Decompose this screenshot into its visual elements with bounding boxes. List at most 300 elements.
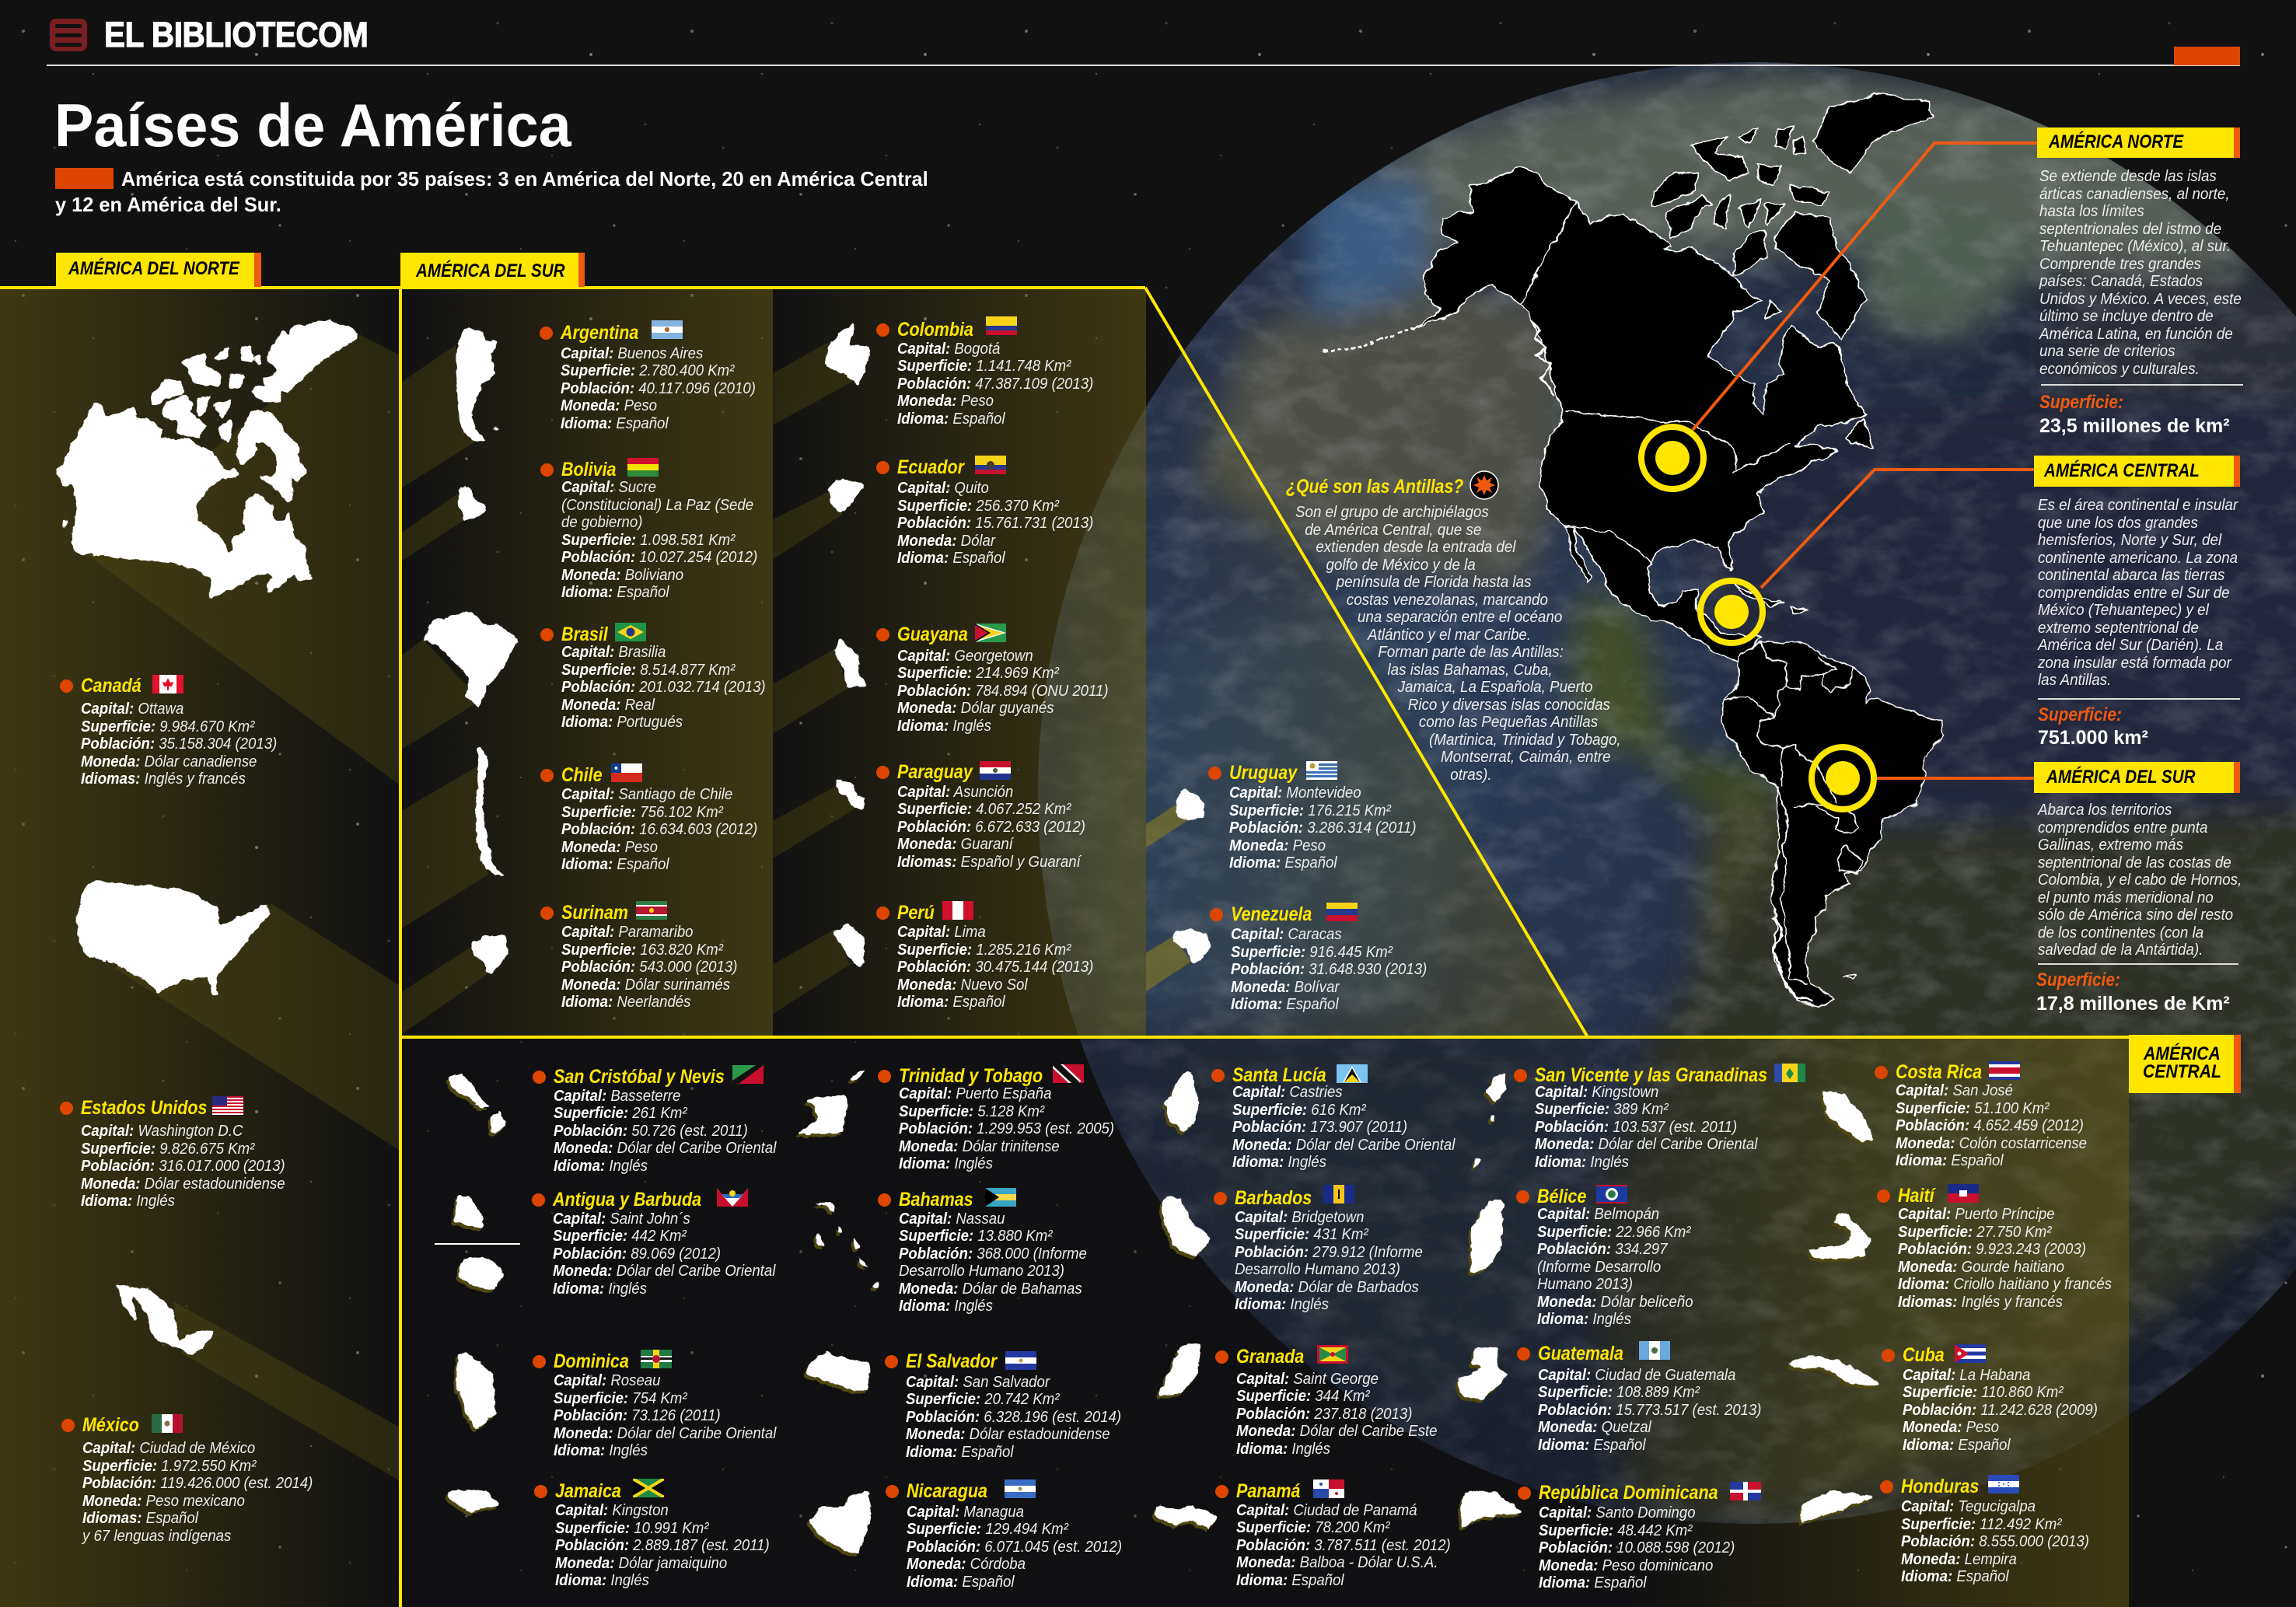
country: Haití	[1877, 1184, 2110, 1311]
country: Cuba: Cuba	[1903, 1344, 1945, 1366]
text: Antillas description: extienden desde la entrada del	[1316, 539, 1515, 556]
text: Antillas description: una separación entre el océano	[1358, 609, 1562, 626]
country: Costa Rica: Capital: San José	[1896, 1082, 2013, 1099]
stat: superficie sur: Superficie:	[2036, 969, 2120, 990]
country: Paraguay: Paraguay	[897, 761, 973, 783]
country: México: México	[82, 1414, 139, 1436]
country: San Cristóbal y Nevis: Capital: Basseterre	[554, 1087, 680, 1104]
country: Venezuela	[1210, 903, 1443, 1014]
text: América del Sur description: Abarca los territorios	[2038, 802, 2172, 819]
stat value: sur: 17,8 millones de Km²	[2036, 993, 2230, 1015]
country: Panamá	[1215, 1479, 1449, 1589]
country: Nicaragua: Superficie: 129.494 Km²	[907, 1521, 1068, 1538]
panel: América del Norte gradient and beams	[0, 289, 399, 1607]
country: Granada: Población: 237.818 (2013)	[1236, 1406, 1412, 1423]
country: Guayana: Capital: Georgetown	[897, 647, 1033, 664]
tab backgrounds	[56, 128, 2241, 1093]
text: América Norte description: último se incluye dentro de	[2039, 308, 2214, 325]
country: Brasil	[540, 623, 774, 732]
country: Surinam: Población: 543.000 (2013)	[561, 959, 737, 976]
stat: superficie norte: Superficie:	[2039, 392, 2123, 413]
country: Bélice: Superficie: 22.966 Km²	[1537, 1224, 1690, 1241]
country: Guatemala	[1517, 1342, 1750, 1455]
country: Santa Lucía: Población: 173.907 (2011)	[1232, 1119, 1407, 1136]
country: Dominica: Población: 73.126 (2011)	[554, 1407, 721, 1424]
country: Bahamas: Capital: Nassau	[899, 1210, 1005, 1227]
heading: América Central: CENTRAL	[2143, 1061, 2221, 1082]
country: San Cristóbal y Nevis: Moneda: Dólar del Caribe Oriental	[554, 1140, 776, 1157]
country: Ecuador: Capital: Quito	[897, 480, 989, 497]
country: Bélice: Bélice	[1537, 1186, 1586, 1207]
country: México: Capital: Ciudad de México	[82, 1440, 255, 1457]
panel: América del Sur column gradients and beams	[400, 289, 1589, 1036]
country: Antigua y Barbuda: Superficie: 442 Km²	[553, 1228, 687, 1245]
country: Canadá: Canadá	[81, 675, 142, 697]
map: Estados Unidos	[78, 881, 271, 995]
marker: América Norte	[1641, 427, 1704, 489]
country: Honduras: Idioma: Español	[1901, 1568, 2009, 1585]
country: San Vicente y las Granadinas: Superficie: 389 Km²	[1535, 1101, 1669, 1118]
country: Ecuador: Idioma: Español	[897, 550, 1005, 567]
heading: América Norte: AMÉRICA NORTE	[2049, 131, 2183, 152]
country: Trinidad y Tobago: Capital: Puerto España	[899, 1085, 1051, 1102]
country: Surinam: Moneda: Dólar surinamés	[561, 976, 730, 994]
text: Antillas description: Montserrat, Caimán, entre	[1441, 749, 1610, 766]
country: Honduras: Superficie: 112.492 Km²	[1901, 1516, 2061, 1533]
country: Dominica: Dominica	[554, 1350, 629, 1372]
country: Venezuela: Venezuela	[1231, 903, 1312, 925]
country: Barbados: Capital: Bridgetown	[1235, 1209, 1364, 1226]
text: América Central description: América del Sur (Darién). La	[2038, 637, 2223, 654]
country: Granada	[1215, 1345, 1449, 1459]
country: Costa Rica: Superficie: 51.100 Km²	[1896, 1099, 2049, 1116]
country: México: Moneda: Peso mexicano	[82, 1493, 245, 1510]
country: El Salvador: Idioma: Español	[905, 1444, 1013, 1461]
country: Jamaica: Idioma: Inglés	[555, 1572, 649, 1589]
country: Guatemala: Guatemala	[1538, 1343, 1623, 1364]
text: América Norte description: una serie de criterios	[2039, 343, 2175, 360]
country: Perú: Perú	[897, 902, 935, 924]
country: Honduras: Capital: Tegucigalpa	[1901, 1498, 2036, 1515]
country: Canadá: Población: 35.158.304 (2013)	[81, 735, 277, 753]
text: América del Sur description: salvedad de la Antártida).	[2038, 941, 2203, 959]
map: América continent silhouette	[1322, 93, 1944, 1008]
country: Antigua y Barbuda: Moneda: Dólar del Caribe Oriental	[553, 1263, 775, 1280]
country: Uruguay: Superficie: 176.215 Km²	[1229, 802, 1391, 819]
icon: Antillas star	[1470, 471, 1498, 499]
heading: América del Sur: AMÉRICA DEL SUR	[416, 260, 565, 281]
country: Santa Lucía: Santa Lucía	[1232, 1064, 1326, 1086]
country: Bolivia: (Constitucional) La Paz (Sede	[561, 496, 753, 513]
country: República Dominicana: Idioma: Español	[1539, 1574, 1647, 1591]
country: San Cristóbal y Nevis: San Cristóbal y Nevis	[554, 1066, 725, 1088]
country: Guatemala: Capital: Ciudad de Guatemala	[1538, 1367, 1735, 1384]
heading: Antillas: ¿Qué son las Antillas?	[1286, 476, 1463, 498]
country: Nicaragua: Nicaragua	[907, 1480, 987, 1502]
country: Argentina: Moneda: Peso	[561, 397, 657, 414]
logo text: EL BIBLIOTECOM	[104, 15, 368, 54]
maps: países de América del Sur	[424, 321, 870, 973]
text: América Central description: las Antillas.	[2038, 672, 2111, 689]
country: Estados Unidos	[60, 1096, 285, 1210]
text: América Norte description: países: Canadá, Estados	[2039, 273, 2203, 290]
country: Santa Lucía: Capital: Castries	[1232, 1084, 1343, 1101]
country: San Cristóbal y Nevis: Idioma: Inglés	[554, 1157, 648, 1174]
country: Uruguay: Población: 3.286.314 (2011)	[1229, 819, 1417, 837]
country: Surinam: Superficie: 163.820 Km²	[561, 941, 723, 958]
country: Perú	[876, 901, 1110, 1011]
country: Chile: Moneda: Peso	[561, 838, 658, 855]
country: Guayana: Población: 784.894 (ONU 2011)	[897, 683, 1109, 700]
country: El Salvador: Superficie: 20.742 Km²	[905, 1391, 1059, 1408]
text: Antillas description: las islas Bahamas, Cuba,	[1387, 661, 1553, 678]
country: Bahamas: Bahamas	[899, 1188, 973, 1210]
country: Nicaragua	[886, 1479, 1119, 1591]
callout: ¿Qué son las Antillas?	[1286, 474, 1504, 785]
country: Honduras: Moneda: Lempira	[1901, 1550, 2017, 1567]
text: América Central description: continental abarca las tierras	[2038, 567, 2224, 584]
country: Chile: Superficie: 756.102 Km²	[561, 804, 723, 821]
text: Antillas description: Atlántico y el mar Caribe.	[1368, 627, 1531, 644]
country: Bélice: Moneda: Dólar beliceño	[1537, 1294, 1693, 1311]
text: América Central description: hemisferios, Norte y Sur, del	[2038, 532, 2221, 549]
text: América Central description: que une los dos grandes	[2038, 515, 2198, 532]
text: América Norte description: septentrionales del istmo de	[2039, 221, 2221, 238]
country: Colombia: Colombia	[897, 319, 973, 341]
heading: América del Sur: AMÉRICA DEL SUR	[2046, 767, 2196, 788]
country: Panamá: Idioma: Español	[1236, 1572, 1344, 1589]
panel: América Norte	[2037, 128, 2243, 438]
country: Brasil: Idioma: Portugués	[561, 714, 683, 731]
heading: América Central: AMÉRICA CENTRAL	[2044, 460, 2200, 481]
text: Antillas description: Forman parte de las Antillas:	[1378, 644, 1564, 661]
country: Trinidad y Tobago: Trinidad y Tobago	[899, 1065, 1043, 1087]
text: América Norte description: Tehuantepec (México), al sur.	[2039, 238, 2231, 255]
country: Perú: Moneda: Nuevo Sol	[897, 976, 1027, 994]
country: Nicaragua: Moneda: Córdoba	[907, 1556, 1026, 1573]
text: América Central description: comprendidas entre el Sur de	[2038, 585, 2230, 602]
country: Uruguay: Capital: Montevideo	[1229, 784, 1361, 802]
country: México: Población: 119.426.000 (est. 2014)	[82, 1475, 313, 1492]
text: América Central description: zona insular está formada por	[2038, 655, 2231, 672]
country: Dominica: Moneda: Dólar del Caribe Oriental	[554, 1424, 776, 1441]
country: San Vicente y las Granadinas: Capital: Kingstown	[1535, 1084, 1658, 1101]
country: Granada: Capital: Saint George	[1236, 1371, 1379, 1388]
country: San Vicente y las Granadinas: Moneda: Dólar del Caribe Oriental	[1535, 1136, 1757, 1153]
country: San Cristóbal y Nevis: Superficie: 261 Km²	[554, 1105, 687, 1122]
country: Dominica: Capital: Roseau	[554, 1372, 660, 1389]
country: Chile	[540, 763, 774, 874]
country: Cuba: Superficie: 110.860 Km²	[1903, 1384, 2063, 1401]
country: Argentina	[540, 320, 756, 432]
country: Costa Rica: Costa Rica	[1896, 1061, 1982, 1083]
text: América Norte description	[2039, 168, 2242, 378]
country: Venezuela: Población: 31.648.930 (2013)	[1231, 961, 1427, 978]
country: Barbados: Moneda: Dólar de Barbados	[1235, 1279, 1419, 1296]
country: Uruguay: Idioma: Español	[1229, 854, 1337, 872]
country: Cuba: Población: 11.242.628 (2009)	[1903, 1401, 2098, 1418]
country: Bolivia: de gobierno)	[561, 514, 642, 531]
text: América Central description: continente americano. La zona	[2038, 549, 2238, 566]
text: Antillas description: (Martinica, Trinidad y Tobago,	[1429, 731, 1621, 748]
text: América del Sur description: Colombia, y el cabo de Hornos,	[2038, 872, 2242, 889]
country: Barbados: Desarrollo Humano 2013)	[1235, 1261, 1400, 1278]
country: Nicaragua: Idioma: Español	[907, 1574, 1015, 1591]
country: Jamaica: Jamaica	[555, 1480, 621, 1502]
country: Cuba	[1882, 1343, 2115, 1454]
country: Guayana: Idioma: Inglés	[897, 717, 991, 734]
country: Haití: Haití	[1898, 1185, 1934, 1207]
country: Surinam: Idioma: Neerlandés	[561, 994, 690, 1011]
country: Cuba: Moneda: Peso	[1903, 1419, 1999, 1436]
country: Barbados: Superficie: 431 Km²	[1235, 1226, 1368, 1243]
country: Estados Unidos: Capital: Washington D.C	[81, 1123, 243, 1140]
country: Dominica: Superficie: 754 Km²	[554, 1390, 687, 1407]
country: Haití: Población: 9.923.243 (2003)	[1898, 1241, 2086, 1258]
country: Ecuador	[876, 456, 1110, 568]
country: Dominica: Idioma: Inglés	[554, 1442, 648, 1459]
country: Bolivia: Moneda: Boliviano	[561, 566, 683, 583]
country: Uruguay	[1208, 761, 1442, 872]
country: República Dominicana: Población: 10.088.598 (2012)	[1539, 1539, 1735, 1556]
country: Colombia	[876, 318, 1110, 428]
country: Barbados: Población: 279.912 (Informe	[1235, 1244, 1423, 1261]
country: Brasil: Brasil	[561, 624, 608, 645]
yellow panel borders	[0, 288, 2129, 1607]
title: Países de América	[54, 91, 571, 159]
country: Colombia: Idioma: Español	[897, 410, 1005, 428]
country: Estados Unidos: Idioma: Inglés	[81, 1193, 175, 1210]
country: Perú: Capital: Lima	[897, 924, 986, 941]
country: República Dominicana: Capital: Santo Domingo	[1539, 1504, 1696, 1521]
country: México	[61, 1414, 313, 1544]
country: Canadá: Idiomas: Inglés y francés	[81, 770, 246, 788]
connector lines: regions	[1693, 143, 2037, 778]
text: Antillas description: Son el grupo de archipiélagos	[1295, 504, 1489, 521]
country: Antigua y Barbuda: Capital: Saint John´s	[553, 1210, 690, 1227]
country: Barbados: Barbados	[1235, 1187, 1312, 1209]
text: América Norte description: económicos y culturales.	[2039, 361, 2200, 378]
country: El Salvador	[885, 1350, 1118, 1462]
country: Canadá: Capital: Ottawa	[81, 700, 183, 718]
country: Venezuela: Idioma: Español	[1231, 996, 1339, 1013]
country: Argentina: Idioma: Español	[561, 415, 669, 432]
country: Estados Unidos: Población: 316.017.000 (2013)	[81, 1158, 285, 1175]
text: América del Sur description: Gallinas, extremo más	[2038, 837, 2183, 854]
country: Granada: Superficie: 344 Km²	[1236, 1388, 1370, 1405]
country: Bélice: Capital: Belmopán	[1537, 1206, 1659, 1223]
country: Chile: Capital: Santiago de Chile	[561, 786, 732, 803]
panel: América del Sur	[2034, 762, 2240, 1018]
country: San Vicente y las Granadinas: Población: 103.537 (est. 2011)	[1535, 1119, 1737, 1136]
map: Canadá	[55, 320, 357, 599]
text: Antillas description: península de Florida hasta las	[1337, 574, 1531, 591]
country: Venezuela: Moneda: Bolívar	[1231, 978, 1340, 995]
country: Bolivia: Idioma: Español	[561, 584, 669, 601]
country: Guayana: Guayana	[897, 624, 968, 645]
country: Costa Rica: Población: 4.652.459 (2012)	[1896, 1117, 2084, 1134]
country: Barbados: Idioma: Inglés	[1235, 1296, 1329, 1313]
country: Jamaica	[534, 1479, 767, 1590]
country: Antigua y Barbuda	[532, 1188, 765, 1298]
country: Costa Rica: Moneda: Colón costarricense	[1896, 1135, 2087, 1152]
country: Santa Lucía: Moneda: Dólar del Caribe Oriental	[1232, 1137, 1455, 1154]
country: Paraguay: Superficie: 4.067.252 Km²	[897, 801, 1071, 818]
text: América Norte description: América Latina, en función de	[2039, 325, 2233, 342]
country: San Cristóbal y Nevis	[533, 1065, 766, 1175]
country: San Vicente y las Granadinas: Idioma: Inglés	[1535, 1154, 1629, 1171]
country: El Salvador: Población: 6.328.196 (est. 2014)	[905, 1409, 1121, 1426]
text: América del Sur description	[2038, 802, 2242, 959]
country: Argentina: Población: 40.117.096 (2010)	[561, 379, 756, 397]
intro text	[55, 167, 928, 216]
text: Antillas description: Jamaica, La Española, Puerto	[1398, 679, 1592, 696]
country: Bélice: (Informe Desarrollo	[1537, 1258, 1661, 1275]
country: Nicaragua: Población: 6.071.045 (est. 2012)	[907, 1538, 1122, 1555]
country: Bahamas	[878, 1188, 1111, 1315]
earth globe	[1011, 54, 2296, 1532]
country: Chile: Chile	[561, 764, 603, 786]
country: Cuba: Capital: La Habana	[1903, 1367, 2030, 1384]
country: Brasil: Superficie: 8.514.877 Km²	[561, 661, 735, 678]
country: Ecuador: Ecuador	[897, 456, 964, 478]
country: México: Superficie: 1.972.550 Km²	[82, 1457, 256, 1474]
marker: América del Sur	[1812, 747, 1874, 809]
country: Panamá: Población: 3.787.511 (est. 2012)	[1236, 1536, 1451, 1553]
country: Nicaragua: Capital: Managua	[907, 1504, 1024, 1521]
country: Venezuela: Capital: Caracas	[1231, 926, 1342, 943]
text: Antillas description: Rico y diversas islas conocidas	[1408, 697, 1610, 714]
country: Honduras: Honduras	[1901, 1476, 1979, 1497]
icon: logo mark	[50, 19, 87, 51]
country: Perú: Superficie: 1.285.216 Km²	[897, 941, 1071, 958]
heading: América Central	[2143, 1043, 2221, 1082]
country: Trinidad y Tobago	[878, 1064, 1111, 1173]
country: Estados Unidos: Estados Unidos	[81, 1097, 207, 1119]
text: América Central description: México (Tehuantepec) y el	[2038, 602, 2209, 619]
country: Canadá: Superficie: 9.984.670 Km²	[81, 718, 254, 735]
country: Argentina: Superficie: 2.780.400 Km²	[561, 362, 734, 379]
country: Haití: Idioma: Criollo haitiano y francés	[1898, 1276, 2112, 1293]
country: Guatemala: Moneda: Quetzal	[1538, 1419, 1651, 1436]
country: Panamá: Superficie: 78.200 Km²	[1236, 1519, 1389, 1536]
country: Uruguay: Uruguay	[1229, 762, 1297, 784]
country: Brasil: Capital: Brasilia	[561, 644, 666, 661]
text: América del Sur description: el punto más meridional no	[2038, 889, 2214, 907]
country: Ecuador: Población: 15.761.731 (2013)	[897, 515, 1093, 532]
country: México: y 67 lenguas indígenas	[82, 1527, 231, 1544]
country: Antigua y Barbuda: Antigua y Barbuda	[553, 1188, 701, 1210]
country: San Cristóbal y Nevis: Población: 50.726 (est. 2011)	[554, 1123, 748, 1140]
heading: América del Norte: AMÉRICA DEL NORTE	[68, 258, 239, 279]
text: Antillas description	[1295, 504, 1621, 784]
country: Costa Rica: Idioma: Español	[1896, 1152, 2004, 1169]
country: Bélice: Idioma: Inglés	[1537, 1311, 1631, 1328]
country: Venezuela: Superficie: 916.445 Km²	[1231, 944, 1393, 961]
country: Ecuador: Superficie: 256.370 Km²	[897, 498, 1059, 515]
intro text: América está constituida por 35 países: 3 en América del Norte, 20 en América Central	[121, 167, 928, 190]
country: Bahamas: Superficie: 13.880 Km²	[899, 1228, 1052, 1245]
country: Guayana	[876, 623, 1110, 735]
country: Bahamas: Idioma: Inglés	[899, 1298, 993, 1315]
country: Trinidad y Tobago: Idioma: Inglés	[899, 1155, 993, 1172]
country: Cuba: Idioma: Español	[1903, 1437, 2011, 1454]
country: Uruguay: Moneda: Peso	[1229, 837, 1326, 854]
country: Jamaica: Población: 2.889.187 (est. 2011)	[555, 1537, 770, 1554]
country: Paraguay	[876, 760, 1110, 871]
country: Trinidad y Tobago: Moneda: Dólar trinitense	[899, 1138, 1060, 1155]
country: Bolivia: Bolivia	[561, 459, 617, 480]
country: Antigua y Barbuda: Población: 89.069 (2012)	[553, 1245, 721, 1263]
country: Haití: Idiomas: Inglés y francés	[1898, 1294, 2063, 1311]
country: Paraguay: Capital: Asunción	[897, 784, 1013, 801]
country: San Vicente y las Granadinas	[1514, 1064, 1809, 1172]
panel: América Central dark veil	[402, 1039, 1866, 1607]
country: Bélice: Población: 334.297	[1537, 1241, 1667, 1258]
country: Bahamas: Población: 368.000 (Informe	[899, 1245, 1087, 1263]
country: Colombia: Capital: Bogotá	[897, 341, 1000, 358]
country: Canadá: Moneda: Dólar canadiense	[81, 753, 257, 770]
country: Honduras: Población: 8.555.000 (2013)	[1901, 1533, 2089, 1550]
country: República Dominicana: República Dominicana	[1539, 1482, 1718, 1504]
country: Surinam: Capital: Paramaribo	[561, 924, 694, 941]
text: América del Sur description: septentrional de las costas de	[2038, 854, 2231, 871]
country: Bolivia: Población: 10.027.254 (2012)	[561, 549, 757, 566]
country: Paraguay: Población: 6.672.633 (2012)	[897, 819, 1085, 836]
country: Bahamas: Moneda: Dólar de Bahamas	[899, 1280, 1082, 1297]
country: Santa Lucía	[1211, 1064, 1445, 1172]
country: Panamá: Capital: Ciudad de Panamá	[1236, 1502, 1417, 1519]
country: Bélice	[1516, 1185, 1749, 1329]
country: Bolivia: Superficie: 1.098.581 Km²	[561, 532, 735, 549]
country: Dominica	[533, 1350, 766, 1460]
text: América Central description: extremo septentrional de	[2038, 619, 2199, 636]
country: San Vicente y las Granadinas: San Vicente y las Granadinas	[1535, 1064, 1767, 1086]
text: Antillas description: como las Pequeñas Antillas	[1419, 714, 1598, 731]
country: Guayana: Moneda: Dólar guyanés	[897, 700, 1054, 717]
country: Guatemala: Población: 15.773.517 (est. 2013)	[1538, 1401, 1761, 1418]
orange header block	[2174, 47, 2240, 65]
country: Granada: Granada	[1236, 1346, 1304, 1368]
country: Surinam	[540, 901, 774, 1011]
country: Guayana: Superficie: 214.969 Km²	[897, 665, 1059, 682]
country: Argentina: Capital: Buenos Aires	[561, 345, 703, 362]
country: Santa Lucía: Idioma: Inglés	[1232, 1154, 1326, 1171]
country: Brasil: Población: 201.032.714 (2013)	[561, 679, 766, 696]
header rule	[47, 65, 2240, 66]
country: Bolivia	[540, 458, 774, 602]
text: América Central description	[2038, 497, 2238, 689]
country: Trinidad y Tobago: Población: 1.299.953 (est. 2005)	[899, 1120, 1114, 1137]
text: América del Sur description: comprendidos entre punta	[2038, 819, 2207, 837]
stat value: norte: 23,5 millones de km²	[2039, 415, 2230, 437]
country: Brasil: Moneda: Real	[561, 697, 655, 714]
country: Estados Unidos: Moneda: Dólar estadounidense	[81, 1176, 285, 1193]
stat value: central: 751.000 km²	[2038, 727, 2148, 749]
country: Paraguay: Moneda: Guaraní	[897, 836, 1013, 853]
text: Antillas description: golfo de México y de la	[1326, 557, 1476, 574]
maps: países de América Central	[446, 1069, 1881, 1553]
country: Panamá: Panamá	[1236, 1480, 1300, 1502]
country: Honduras	[1880, 1475, 2113, 1586]
country: El Salvador: Capital: San Salvador	[905, 1374, 1050, 1391]
text: América del Sur description: de los continentes (con la	[2038, 924, 2203, 941]
country: México: Idiomas: Español	[82, 1510, 198, 1527]
panel: América Central	[2034, 456, 2240, 751]
country: Perú: Población: 30.475.144 (2013)	[897, 959, 1093, 976]
country: República Dominicana	[1518, 1481, 1774, 1592]
country: Chile: Población: 16.634.603 (2012)	[561, 821, 757, 838]
